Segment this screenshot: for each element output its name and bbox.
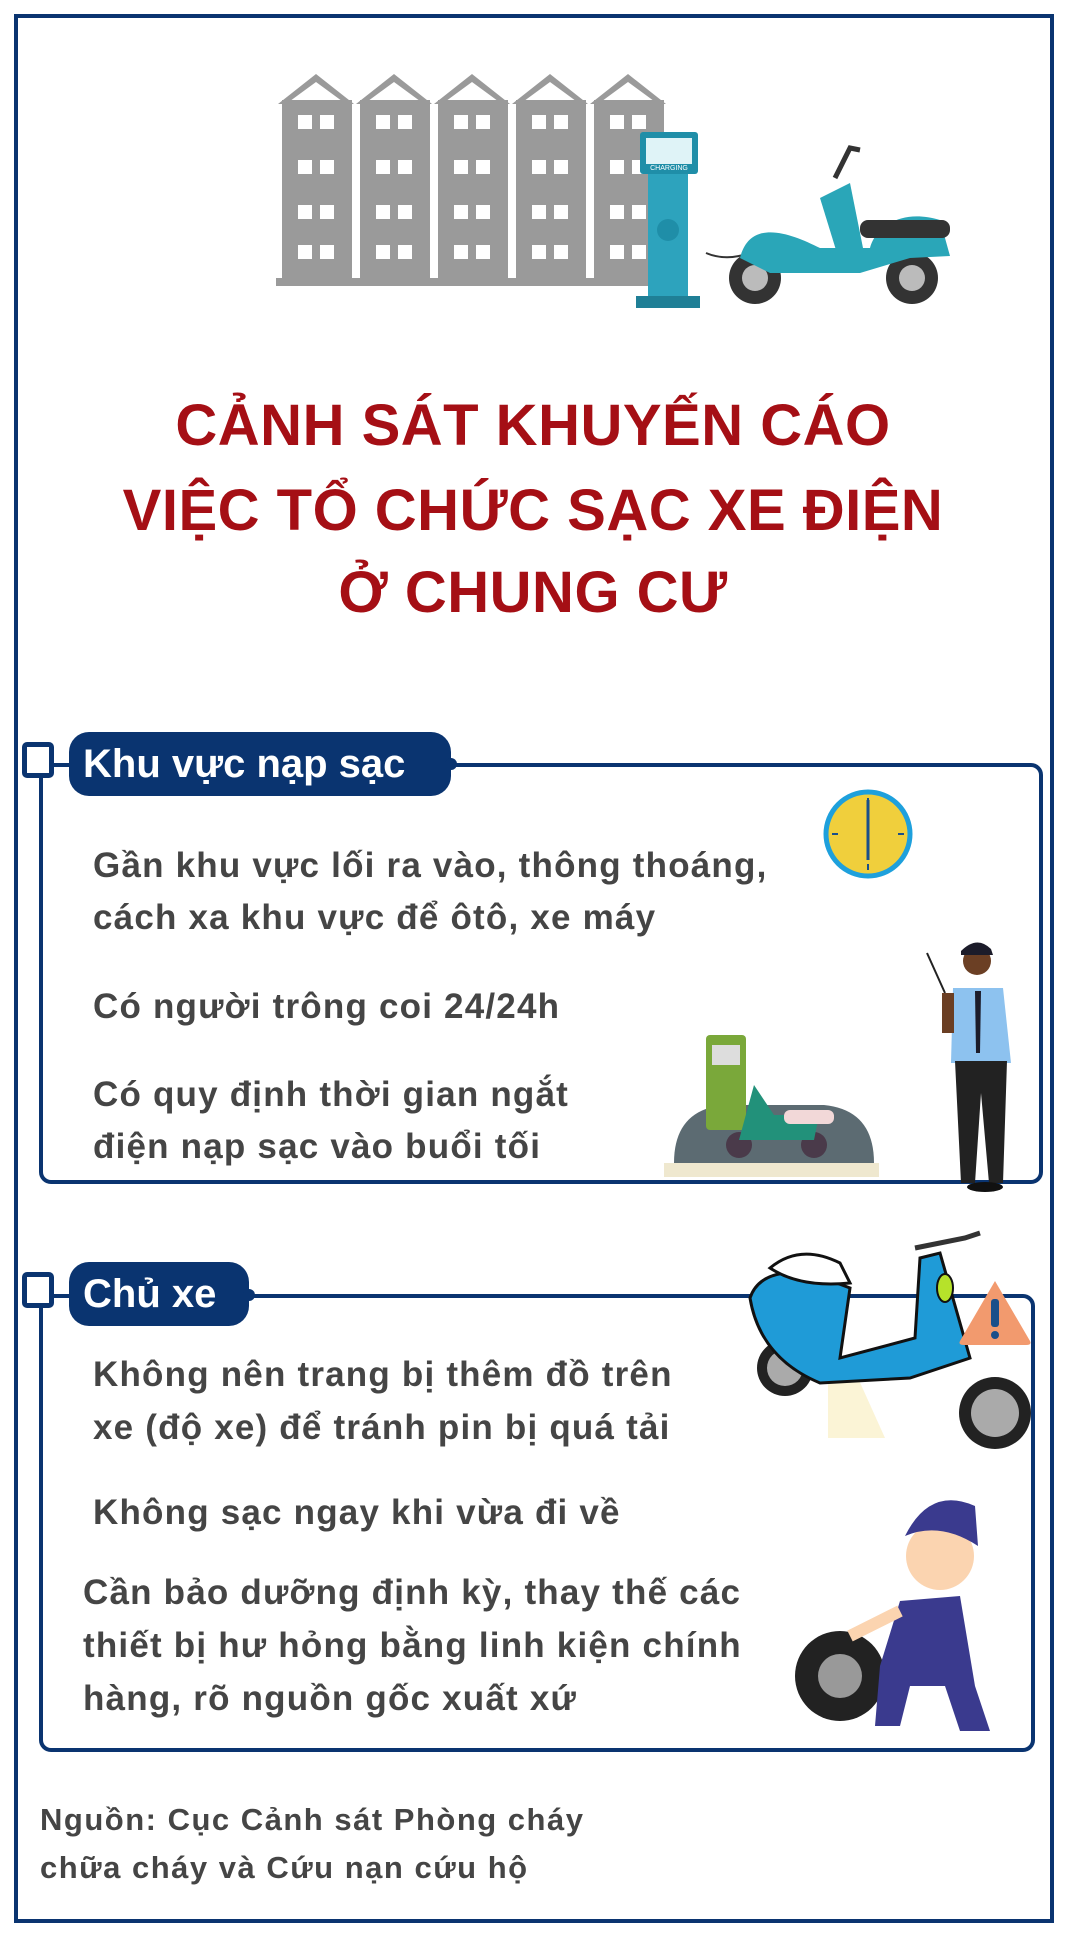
text: item 2: Không sạc ngay khi vừa đi về bbox=[93, 1493, 621, 1532]
text: item 3: hàng, rõ nguồn gốc xuất xứ bbox=[83, 1679, 577, 1718]
panel: charging area bbox=[22, 732, 1043, 1192]
illustration: charging pad with scooter bbox=[664, 1035, 879, 1177]
illustration: mechanic with tire bbox=[795, 1500, 990, 1731]
text: item 2: Có người trông coi 24/24h bbox=[93, 987, 560, 1026]
connector icon bbox=[22, 1272, 54, 1308]
text: item 1: Không nên trang bị thêm đồ trên bbox=[93, 1355, 673, 1394]
title: VIỆC TỔ CHỨC SẠC XE ĐIỆN bbox=[123, 478, 943, 543]
text: item 1: cách xa khu vực để ôtô, xe máy bbox=[93, 898, 656, 937]
illustration: charging station bbox=[636, 132, 700, 308]
illustration: charging station: CHARGING bbox=[650, 165, 688, 172]
heading tab bbox=[69, 732, 451, 796]
connector icon bbox=[22, 742, 54, 778]
illustration: apartment buildings bbox=[276, 74, 666, 286]
text: item 1 bbox=[93, 846, 768, 937]
text: item 3: Có quy định thời gian ngắt bbox=[93, 1075, 569, 1114]
text: item 1 bbox=[93, 1355, 673, 1447]
illustration: security guard bbox=[926, 942, 1011, 1192]
illustration: blue scooter bbox=[748, 1230, 1031, 1449]
text: item 1: xe (độ xe) để tránh pin bị quá tải bbox=[93, 1408, 671, 1447]
panel: vehicle owner bbox=[22, 1230, 1035, 1752]
title bbox=[123, 392, 943, 625]
source note: Nguồn: Cục Cảnh sát Phòng cháy bbox=[40, 1802, 584, 1837]
icon: warning triangle bbox=[960, 1281, 1030, 1345]
text: item 3: điện nạp sạc vào buổi tối bbox=[93, 1127, 541, 1166]
heading tab: Khu vực nạp sạc bbox=[83, 742, 405, 786]
illustration: electric scooter bbox=[706, 145, 950, 304]
icon: clock bbox=[824, 790, 912, 878]
text: item 3: Cần bảo dưỡng định kỳ, thay thế các bbox=[83, 1573, 741, 1612]
heading tab bbox=[69, 1262, 249, 1326]
text: item 3 bbox=[83, 1573, 742, 1718]
heading tab: Chủ xe bbox=[83, 1272, 216, 1316]
title: CẢNH SÁT KHUYẾN CÁO bbox=[175, 393, 891, 458]
text: item 3: thiết bị hư hỏng bằng linh kiện chính bbox=[83, 1626, 742, 1665]
source note: chữa cháy và Cứu nạn cứu hộ bbox=[40, 1850, 529, 1885]
title: Ở CHUNG CƯ bbox=[338, 560, 728, 625]
source note bbox=[40, 1802, 584, 1885]
text: item 3 bbox=[93, 1074, 569, 1166]
text: item 1: Gần khu vực lối ra vào, thông thoáng, bbox=[93, 846, 768, 885]
